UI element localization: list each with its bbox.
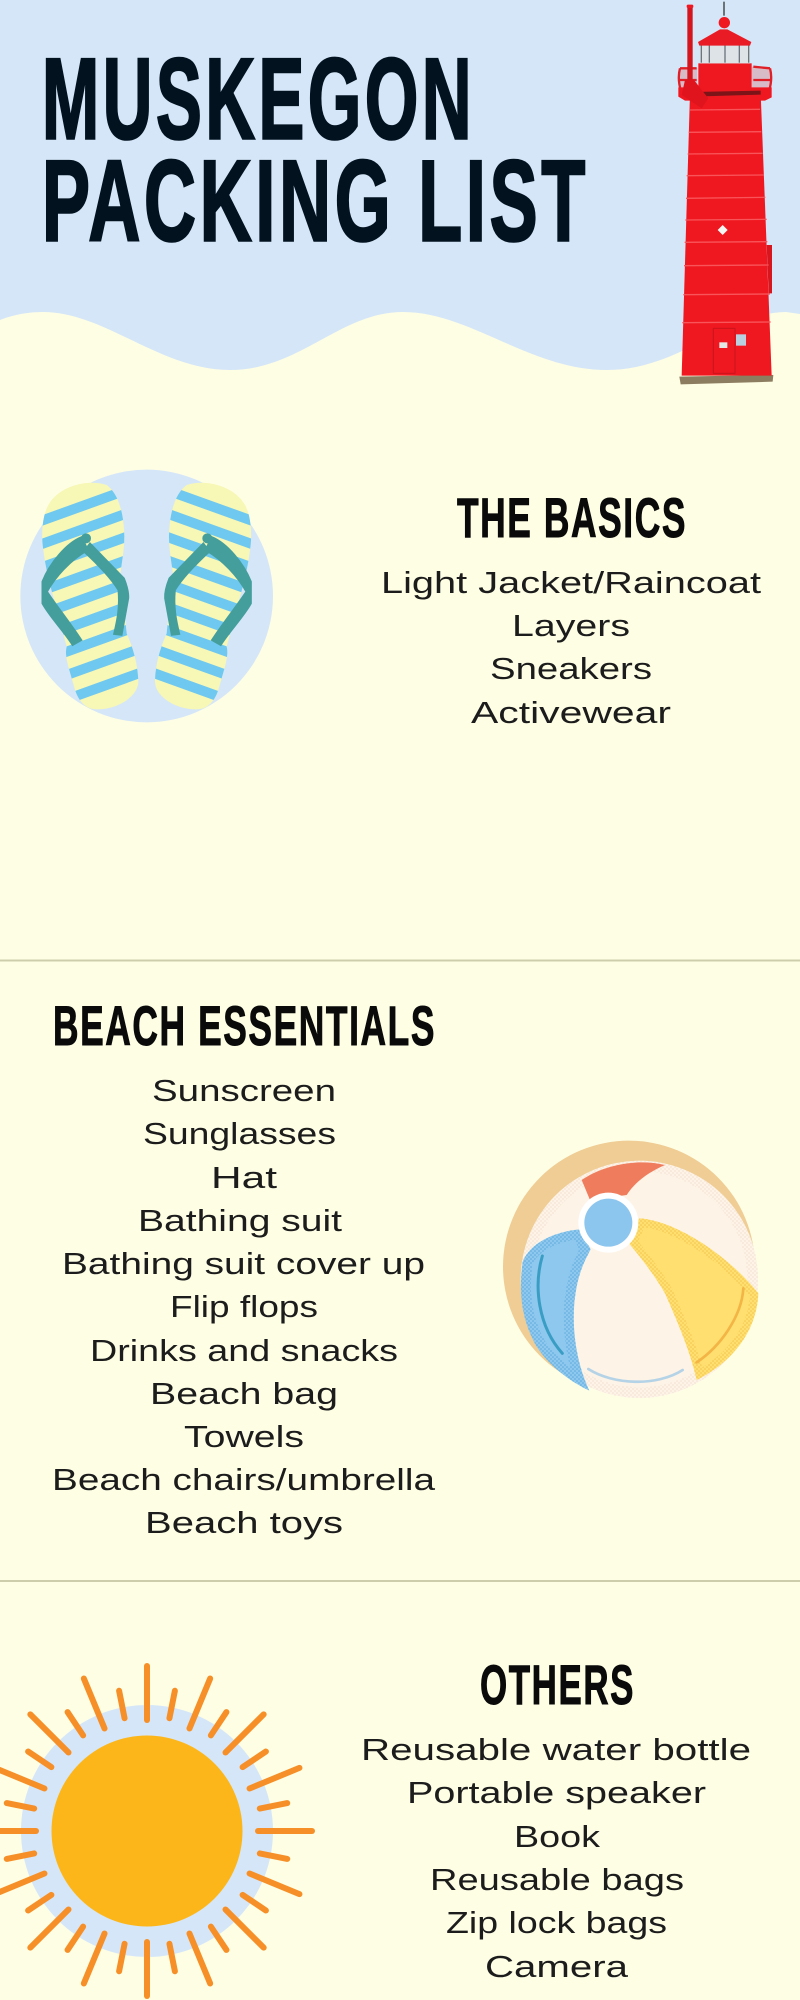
list: beach essentials items: Flip flops <box>170 1289 318 1324</box>
list: beach essentials items: Beach chairs/umbrella <box>52 1462 436 1497</box>
panel: beach essentials <box>52 994 758 1540</box>
list: beach essentials items: Hat <box>211 1160 278 1195</box>
title <box>42 36 589 266</box>
list: beach essentials items: Bathing suit <box>138 1203 342 1238</box>
panel: the basics <box>20 470 761 730</box>
list: the basics items: Layers <box>512 608 630 643</box>
heading: beach essentials: BEACH ESSENTIALS <box>53 994 436 1057</box>
list: others items: Reusable bags <box>430 1862 684 1897</box>
icon: beach ball <box>503 1141 758 1398</box>
list: beach essentials items: Beach bag <box>150 1376 338 1411</box>
sky background <box>0 0 800 400</box>
list: the basics items <box>381 565 761 730</box>
icon: flip flops on blue circle <box>20 470 273 722</box>
list: the basics items: Sneakers <box>490 651 652 686</box>
list: the basics items: Light Jacket/Raincoat <box>381 565 761 600</box>
list: others items: Zip lock bags <box>446 1905 667 1940</box>
list: beach essentials items <box>52 1073 436 1540</box>
list: beach essentials items: Drinks and snacks <box>90 1333 398 1368</box>
panel: others <box>0 1653 751 1996</box>
title: MUSKEGON <box>42 36 475 164</box>
list: others items <box>361 1732 751 1984</box>
list: beach essentials items: Sunglasses <box>143 1116 336 1151</box>
icon: red lighthouse <box>678 2 773 384</box>
icon: sun <box>0 1666 312 1996</box>
list: beach essentials items: Towels <box>184 1419 304 1454</box>
list: beach essentials items: Bathing suit cover up <box>62 1246 425 1281</box>
heading: others: OTHERS <box>480 1653 635 1716</box>
list: others items: Portable speaker <box>407 1775 706 1810</box>
list: beach essentials items: Beach toys <box>145 1505 343 1540</box>
list: others items: Camera <box>485 1949 629 1984</box>
list: the basics items: Activewear <box>471 695 671 730</box>
list: others items: Book <box>514 1819 601 1854</box>
list: others items: Reusable water bottle <box>361 1732 751 1767</box>
list: beach essentials items: Sunscreen <box>152 1073 336 1108</box>
